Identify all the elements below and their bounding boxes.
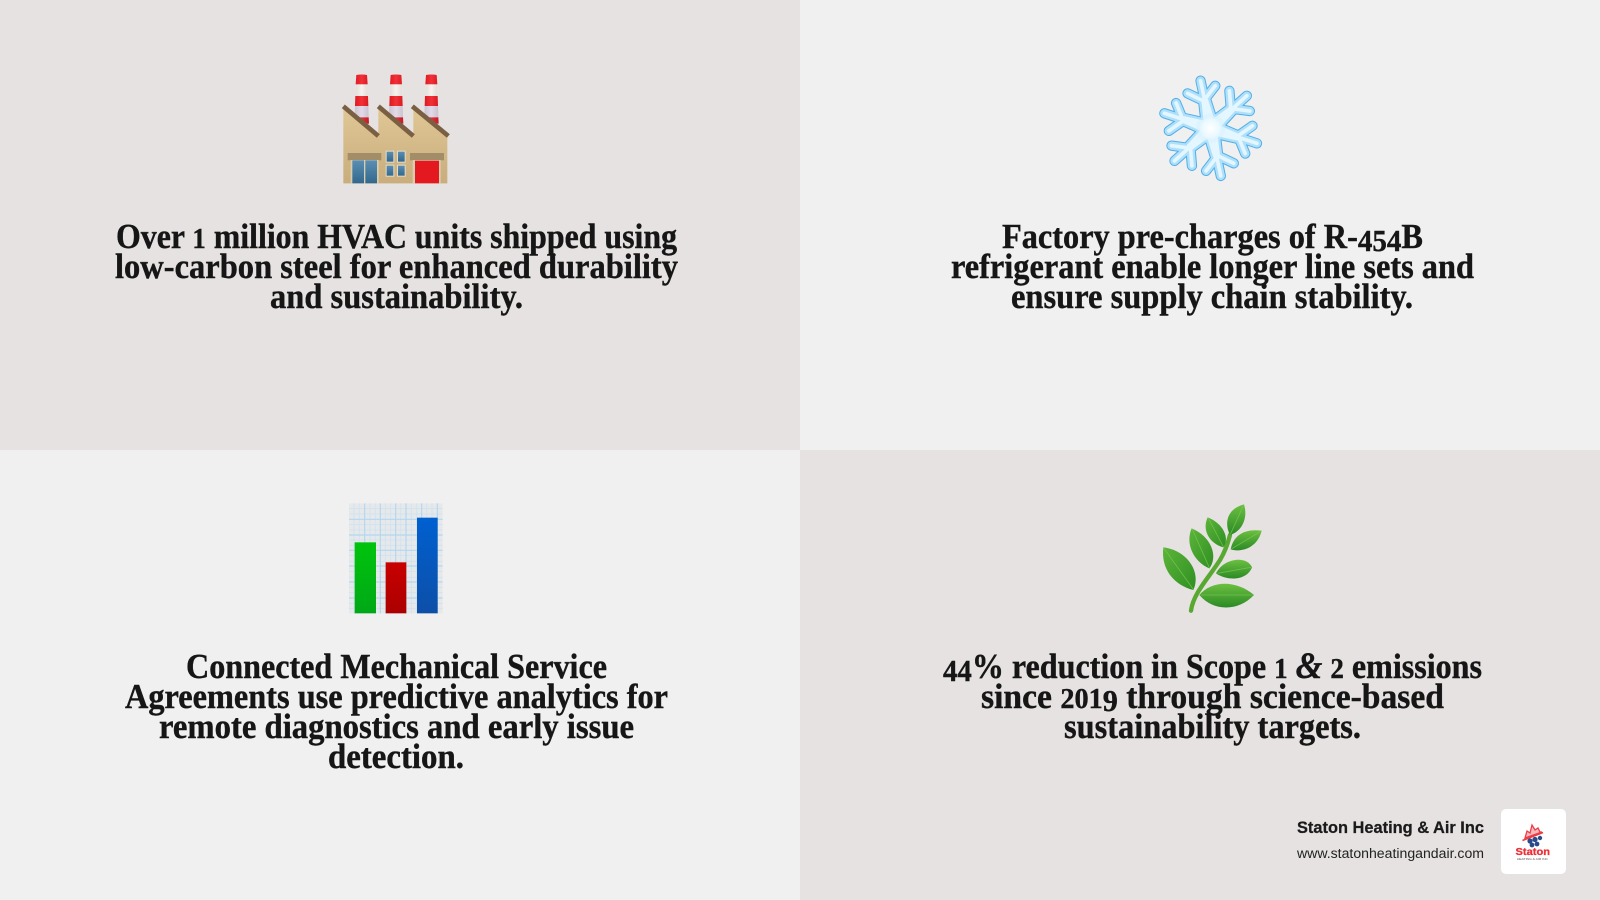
heading: refrigerant: Factory pre-charges of R-454B bbox=[1002, 218, 1423, 258]
icon: bar chart bbox=[349, 503, 443, 613]
heading: emissions: sustainability targets. bbox=[1064, 708, 1361, 746]
heading: low-carbon steel: low-carbon steel for enhanced durability bbox=[115, 248, 678, 286]
heading: refrigerant bbox=[951, 218, 1474, 316]
heading: service agreements: detection. bbox=[328, 738, 464, 776]
heading: emissions: 44% reduction in Scope 1 & 2 emissions bbox=[943, 646, 1482, 688]
heading: service agreements: remote diagnostics and early issue bbox=[159, 708, 634, 746]
heading: low-carbon steel: Over 1 million HVAC units shipped using bbox=[116, 218, 677, 256]
company name: Staton Heating & Air Inc bbox=[1297, 819, 1484, 837]
logo: Staton Heating & Air: HEATING & AIR INC bbox=[1517, 857, 1549, 861]
icon: leaf branch bbox=[1163, 504, 1262, 611]
heading: refrigerant: ensure supply chain stability. bbox=[1011, 278, 1413, 316]
heading: low-carbon steel bbox=[115, 218, 678, 316]
panel: R-454B refrigerant pre-charges bbox=[800, 0, 1600, 450]
heading: emissions: since 2019 through science-based bbox=[981, 678, 1444, 718]
company website: www.statonheatingandair.com bbox=[1296, 846, 1484, 861]
logo: Staton Heating & Air bbox=[1501, 809, 1566, 874]
panel: emissions reduction bbox=[800, 450, 1600, 900]
heading: service agreements bbox=[125, 648, 668, 776]
icon: factory bbox=[343, 74, 448, 183]
panel: connected service agreements bbox=[0, 450, 800, 900]
panel: low-carbon steel shipments bbox=[0, 0, 800, 450]
heading: refrigerant: refrigerant enable longer line sets and bbox=[951, 248, 1474, 286]
heading: service agreements: Connected Mechanical Service bbox=[186, 648, 607, 686]
heading: emissions bbox=[943, 646, 1482, 746]
icon: snowflake bbox=[1160, 78, 1262, 179]
logo: Staton Heating & Air: Staton bbox=[1516, 846, 1550, 858]
heading: service agreements: Agreements use predictive analytics for bbox=[125, 678, 668, 716]
heading: low-carbon steel: and sustainability. bbox=[270, 278, 523, 316]
